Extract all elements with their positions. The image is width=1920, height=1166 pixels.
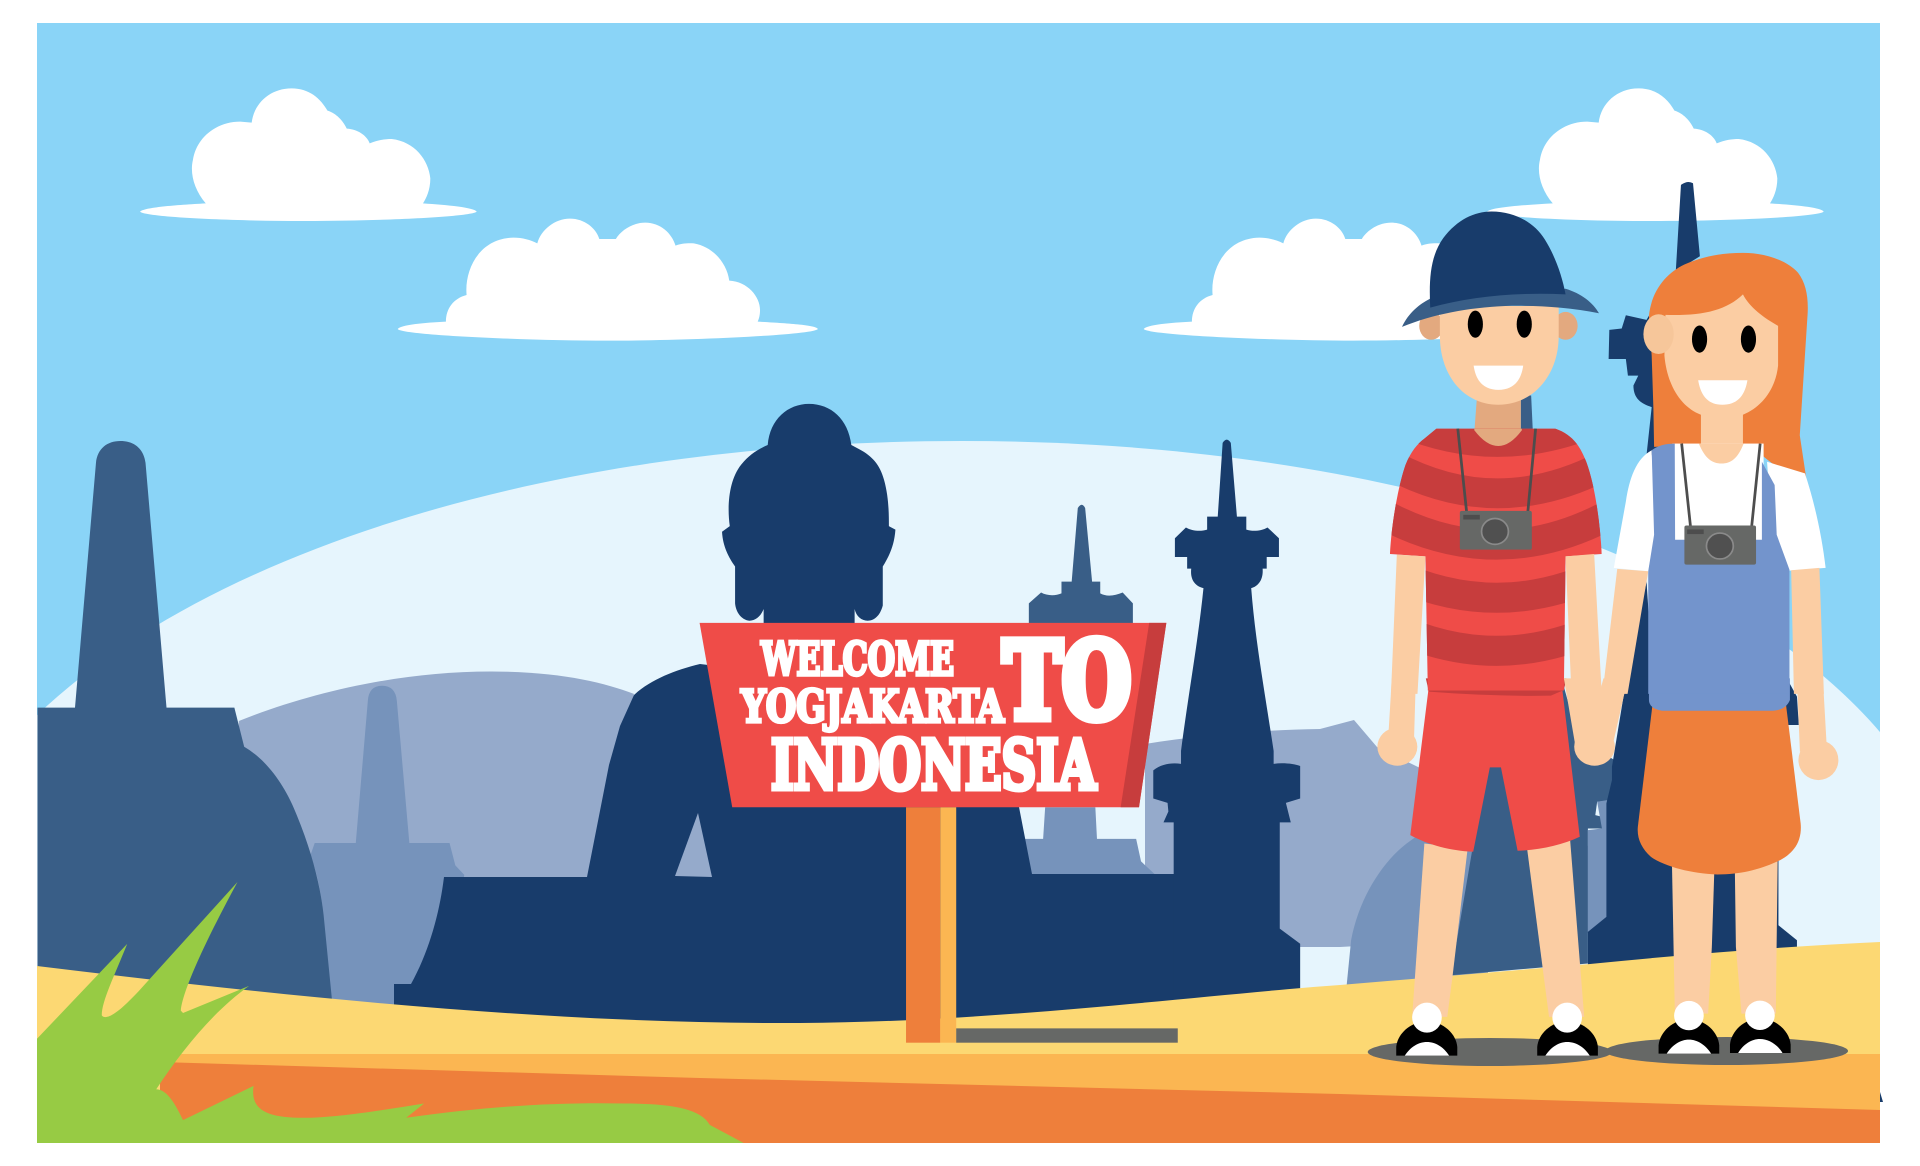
grass (37, 882, 745, 1144)
stupa far left (37, 441, 333, 1006)
woman eyes (1692, 326, 1756, 353)
text: indonesia: INDONESIA (771, 726, 1097, 806)
woman neckline (1699, 444, 1744, 463)
sign board (700, 623, 1166, 807)
grey hill left (238, 672, 634, 906)
woman legs (1672, 857, 1778, 1014)
sky (37, 23, 1880, 732)
woman top (1614, 444, 1826, 571)
camera straps (1458, 429, 1536, 513)
Buddha statue silhouette with tower and base (394, 404, 1300, 1040)
small stupa left (310, 686, 464, 1006)
post (906, 807, 940, 1043)
man legs and shorts (1388, 678, 1598, 1056)
woman camera (1684, 525, 1756, 565)
text: to: TO (1003, 618, 1131, 743)
ground shadows (1368, 1037, 1848, 1066)
overall bib (1648, 444, 1789, 694)
ground: sand (37, 942, 1880, 1090)
man hands (1377, 678, 1615, 766)
woman smile (1698, 380, 1747, 405)
post highlight (940, 807, 956, 1043)
man ears (1419, 312, 1578, 340)
sign side shade (1121, 623, 1166, 807)
sign text (739, 634, 1132, 792)
post shadow (956, 1028, 1178, 1043)
stupa section behind legs (1451, 395, 1615, 975)
woman ear (1643, 314, 1674, 354)
man left arm lower (1388, 678, 1416, 740)
man smile (1474, 366, 1523, 390)
striped shirt (1381, 417, 1612, 694)
woman neck (1701, 402, 1743, 447)
man camera (1460, 511, 1532, 550)
pale hill (37, 441, 1880, 988)
man (1377, 211, 1615, 1056)
signpost (700, 623, 1178, 1043)
text: yogjakarta: YOGJAKARTA (740, 680, 1004, 733)
cloud: centre left (398, 219, 818, 341)
Buddha head (722, 404, 895, 627)
man neck (1474, 395, 1521, 448)
woman camera straps (1682, 444, 1760, 527)
woman face (1664, 294, 1778, 415)
gap under Buddha arm (675, 813, 712, 877)
man shoes (1396, 1003, 1598, 1056)
light stupa slit (1588, 800, 1607, 932)
woman shoes (1659, 1001, 1791, 1054)
man face (1440, 306, 1559, 405)
overall lower (1649, 678, 1790, 711)
domed stupa behind man (1347, 830, 1488, 985)
ground: amber band (175, 1054, 1880, 1110)
cloud: top left (140, 88, 477, 221)
man eyes (1468, 311, 1532, 338)
Buddha body and base (394, 664, 1180, 1040)
hat dome (1430, 211, 1566, 308)
tower silhouette (1153, 440, 1300, 1031)
skirt (1638, 703, 1801, 874)
man arms upper (1391, 554, 1602, 694)
woman (1586, 253, 1838, 1054)
navy tower behind woman (1588, 182, 1799, 967)
woman upper arms (1602, 568, 1824, 694)
ground: orange band (160, 1062, 1880, 1143)
grey hill right (1145, 720, 1640, 947)
cloud: top right (1487, 88, 1824, 221)
hat brim (1402, 289, 1599, 327)
stupa behind sign (1025, 505, 1157, 877)
woman forearms (1586, 678, 1838, 780)
cloud: behind man (1144, 218, 1440, 341)
woman hair (1649, 253, 1808, 481)
text: welcome: WELCOME (760, 632, 954, 686)
stray edge mark (1880, 1092, 1883, 1102)
